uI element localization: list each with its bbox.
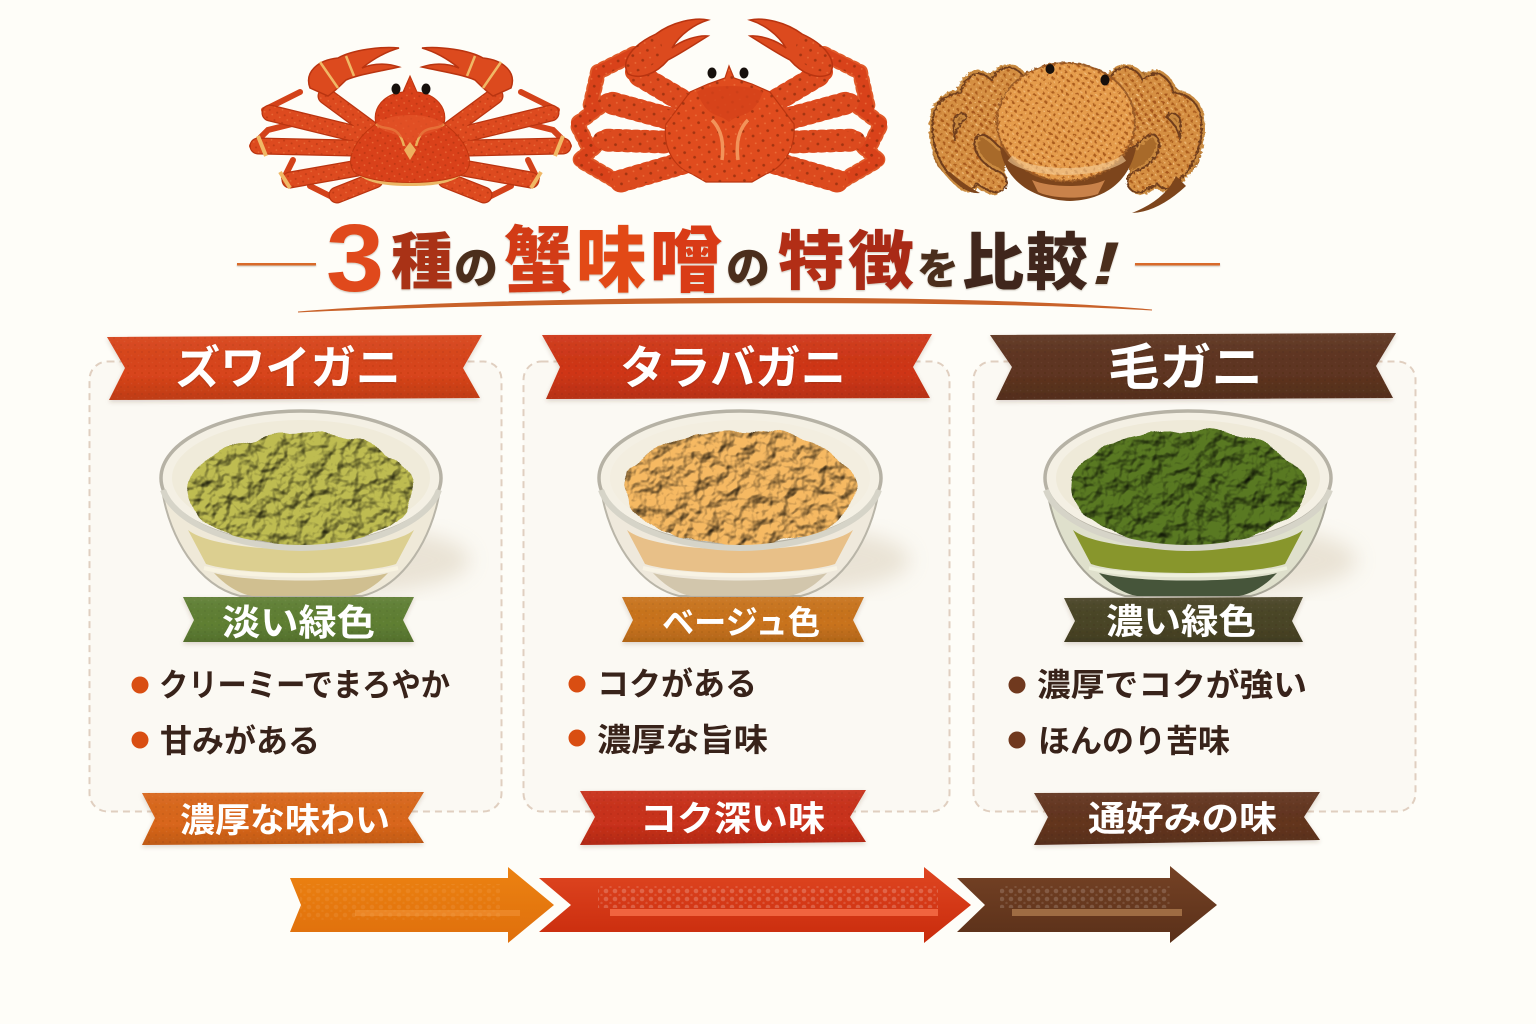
title: 種 [391, 228, 453, 296]
colour label ribbon: ベージュ色 [662, 604, 820, 641]
bowl of dark green miso [1045, 411, 1357, 596]
title underline swoosh [298, 298, 1152, 312]
title: の [726, 244, 770, 293]
title: 味 [576, 222, 646, 302]
flavour ribbon: コク深い味 [640, 800, 825, 839]
bowl of beige miso [599, 411, 910, 596]
title: 較 [1026, 229, 1088, 298]
bullet point: rich body: コクがある [597, 666, 757, 702]
bullet point: creamy: クリーミーでまろやか [159, 667, 450, 703]
title: 特 [778, 226, 844, 298]
panel card [974, 362, 1416, 812]
bullet point: sweet: 甘みがある [160, 723, 320, 759]
title: 徴 [848, 226, 914, 298]
colour label ribbon: 淡い緑色 [222, 602, 375, 643]
title [237, 205, 1220, 312]
flavour ribbon [580, 790, 866, 845]
bullet point: umami: 濃厚な旨味 [597, 722, 768, 758]
flavour ribbon: 通好みの味 [1088, 800, 1277, 839]
colour label ribbon: 濃い緑色 [1106, 603, 1256, 642]
bullet point: slight bitterness: ほんのり苦味 [1038, 723, 1230, 759]
title: 3 [326, 205, 384, 312]
heading ribbon [542, 334, 932, 399]
colour label ribbon [1064, 597, 1303, 642]
title: の [454, 244, 498, 293]
panel: 毛ガニ [974, 333, 1416, 845]
arrow: orange [290, 867, 554, 943]
title flank line right [1135, 263, 1220, 266]
colour label ribbon [622, 597, 864, 642]
icon: king crab (taraba) [577, 19, 881, 182]
title: を [917, 246, 959, 293]
title: 比 [962, 229, 1024, 298]
bullet point: rich and full-bodied: 濃厚でコクが強い [1037, 667, 1307, 703]
flavour ribbon [142, 792, 424, 845]
icon: snow crab (zuwai) [252, 47, 569, 197]
heading ribbon: タラバガニ [620, 342, 846, 394]
panel card [524, 362, 950, 812]
title: ! [1092, 230, 1120, 297]
heading ribbon [107, 335, 482, 400]
title: 蟹 [504, 222, 572, 302]
title: 噌 [650, 222, 722, 302]
arrow: red [539, 867, 971, 943]
heading ribbon [990, 333, 1396, 400]
panel card [90, 362, 502, 812]
flavour ribbon [1034, 792, 1320, 845]
icon: horsehair crab (kegani) [932, 63, 1202, 213]
panel: タラバガニ [524, 334, 950, 845]
colour label ribbon [183, 597, 414, 643]
heading ribbon: ズワイガニ [175, 342, 401, 394]
title flank line left [237, 263, 316, 266]
arrow: brown [957, 866, 1217, 943]
heading ribbon: 毛ガニ [1108, 340, 1263, 396]
panel: ズワイガニ [90, 335, 502, 845]
bowl of pale green miso [161, 411, 470, 596]
flavour ribbon: 濃厚な味わい [180, 802, 390, 840]
